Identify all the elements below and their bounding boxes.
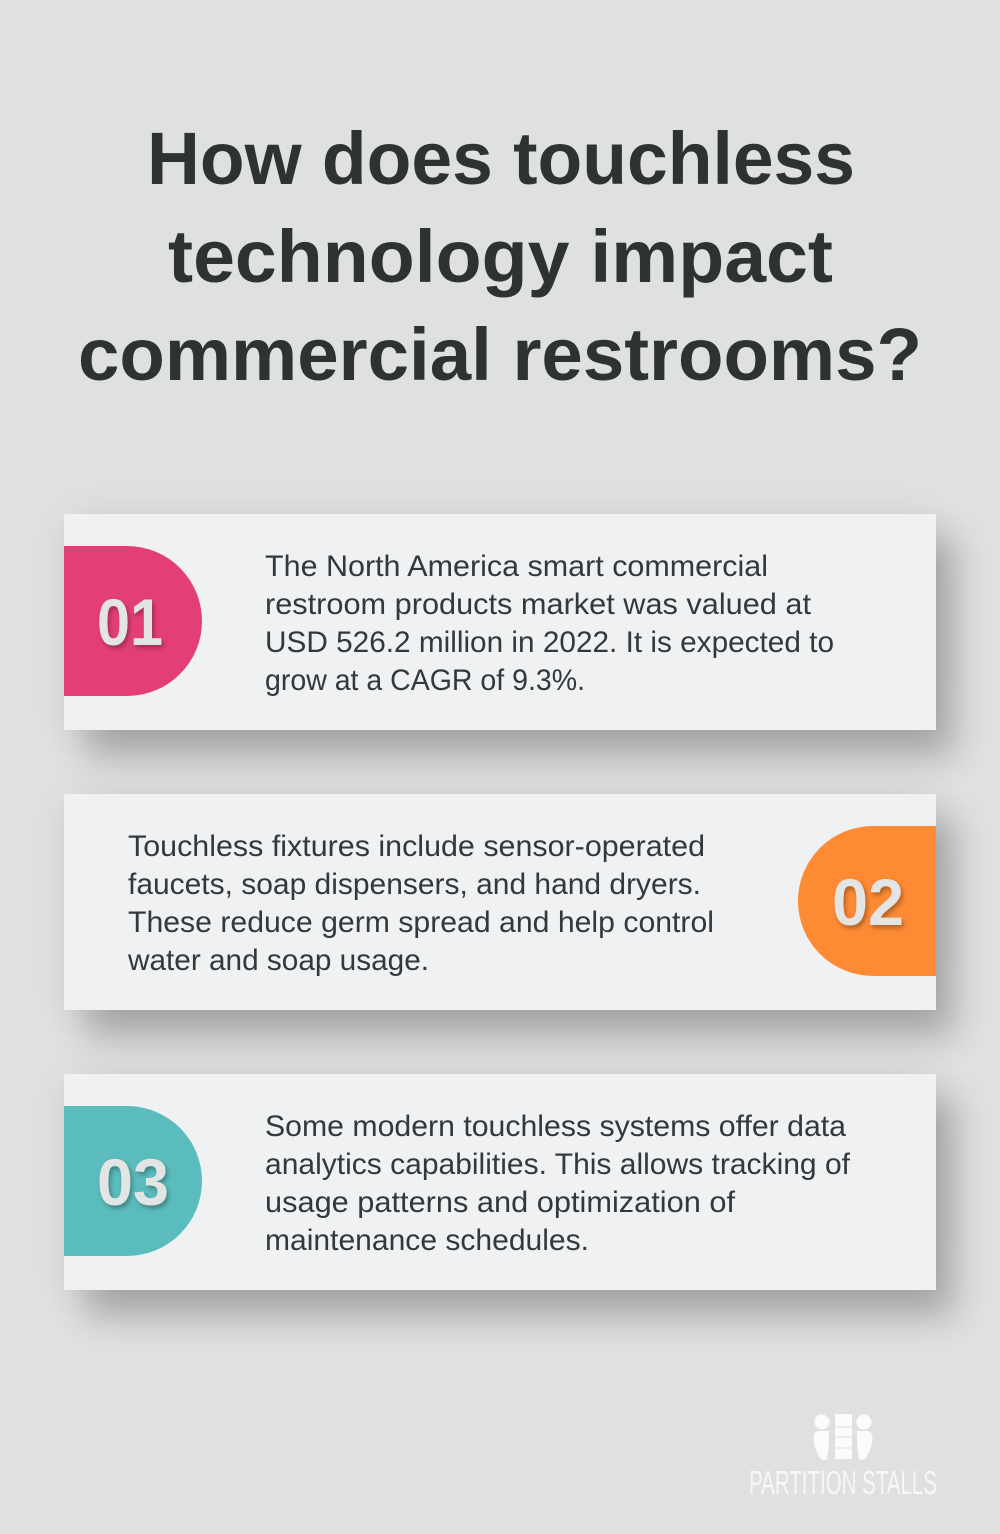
text block 03 [265,1110,851,1257]
text block 01 [265,550,834,697]
badge 02: 02 [832,865,904,939]
title: How does touchless [147,117,855,200]
badge 03 [64,1106,202,1256]
title: technology impact [168,215,833,298]
title: commercial restrooms? [78,313,922,396]
text block 02: These reduce germ spread and help control [128,906,714,939]
text block 02: Touchless fixtures include sensor-operated [128,830,705,863]
badge 01 [64,546,202,696]
panel: card 02 [64,794,954,1036]
text block 02: faucets, soap dispensers, and hand dryers. [128,868,701,901]
badge 02 [798,826,936,976]
text block 03: Some modern touchless systems offer data [265,1110,846,1143]
text block 03: usage patterns and optimization of [265,1186,736,1219]
text block 03: maintenance schedules. [265,1224,589,1257]
icon: two figures and stall [814,1414,873,1460]
panel: card 01 [64,514,954,756]
title [78,117,922,396]
badge 01: 01 [97,585,163,659]
text block 01: grow at a CAGR of 9.3%. [265,664,585,697]
text block 02: water and soap usage. [127,944,429,977]
text block 03: analytics capabilities. This allows tracking of [265,1148,851,1181]
panel: card 03 [64,1074,954,1316]
logo: Partition Stalls [749,1414,937,1501]
text block 01: USD 526.2 million in 2022. It is expected to [265,626,834,659]
badge 03: 03 [97,1145,169,1219]
text block 01: restroom products market was valued at [265,588,812,621]
text block 02 [127,830,714,977]
text block 01: The North America smart commercial [265,550,768,583]
